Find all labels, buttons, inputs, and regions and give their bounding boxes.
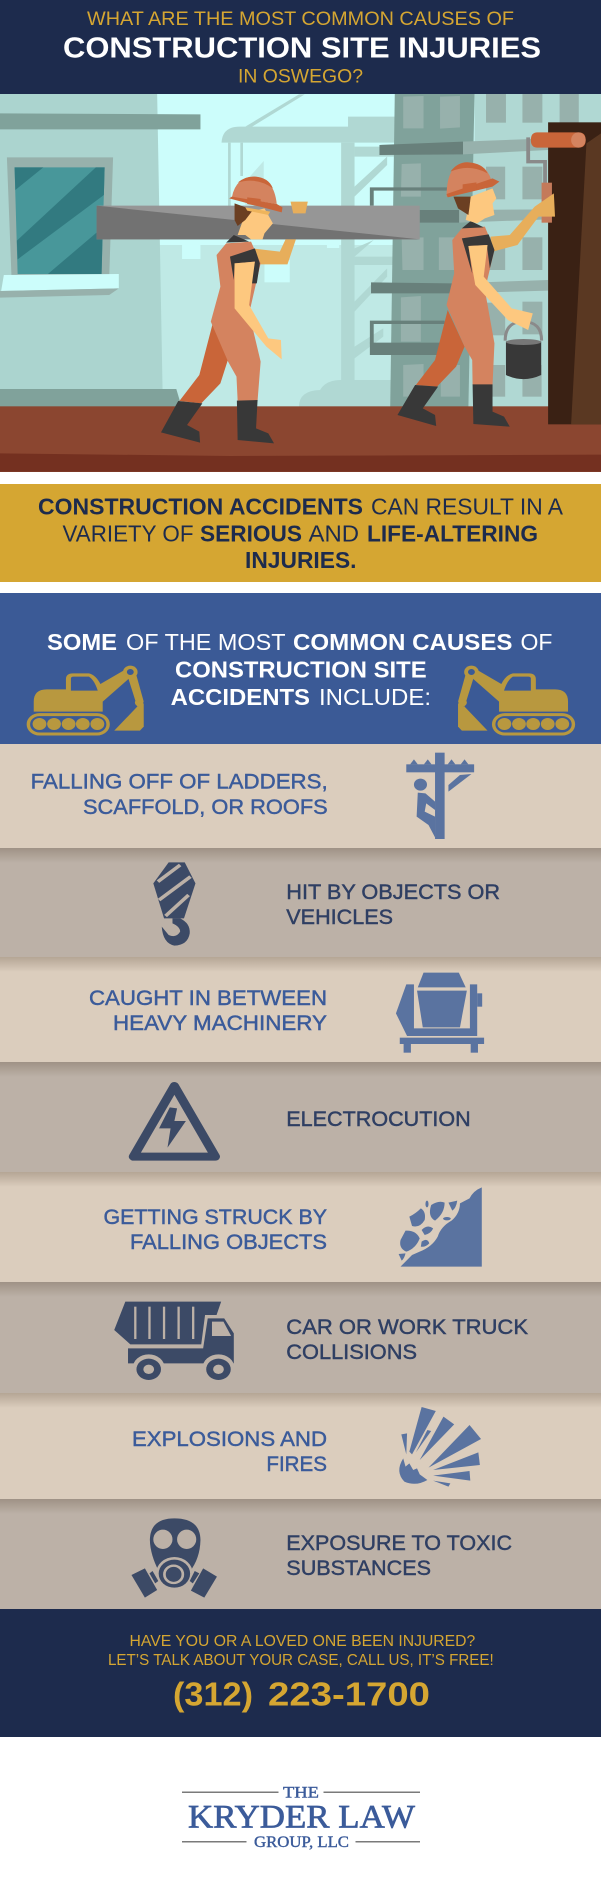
panel: explosions and fires xyxy=(0,1393,601,1499)
cause text xyxy=(104,1206,327,1254)
worker carrying beam xyxy=(161,177,308,443)
call to action text: LET’S TALK ABOUT YOUR CASE, CALL US, IT’S FREE! xyxy=(108,1652,494,1669)
ground xyxy=(0,406,601,472)
panel: truck collisions xyxy=(0,1282,601,1393)
window xyxy=(0,157,119,298)
cause text xyxy=(286,1532,512,1580)
panel: caught in machinery xyxy=(0,957,601,1062)
section heading text: ACCIDENTS xyxy=(171,684,310,710)
statement text: SERIOUS xyxy=(200,520,302,546)
section heading text: OF THE MOST xyxy=(126,629,286,655)
cause text: FALLING OBJECTS xyxy=(130,1231,327,1254)
icon: dump truck xyxy=(114,1302,235,1382)
cause text: FALLING OFF OF LADDERS, xyxy=(31,770,328,793)
paint roller xyxy=(528,132,586,223)
section heading text xyxy=(47,629,552,710)
cause text xyxy=(286,881,500,929)
header banner xyxy=(0,0,601,94)
cause text: COLLISIONS xyxy=(286,1341,417,1364)
icon: excavator right xyxy=(458,666,573,734)
gold statement banner xyxy=(0,484,601,582)
logo: The Kryder Law Group: KRYDER LAW xyxy=(188,1800,416,1836)
cause text: FIRES xyxy=(266,1453,327,1476)
cause text xyxy=(286,1316,528,1364)
statement text: AND xyxy=(308,520,359,546)
cause text: SUBSTANCES xyxy=(286,1557,431,1580)
background crane xyxy=(222,94,399,408)
call to action footer xyxy=(0,1609,601,1737)
section heading text: INCLUDE: xyxy=(319,684,431,710)
section heading text: COMMON CAUSES xyxy=(293,629,512,655)
cause text: HIT BY OBJECTS OR xyxy=(286,881,500,904)
cause text xyxy=(89,987,327,1035)
icon: excavator left xyxy=(28,666,144,734)
logo: The Kryder Law Group: GROUP, LLC xyxy=(254,1834,349,1851)
cause text: CAUGHT IN BETWEEN xyxy=(89,987,327,1010)
section heading text: CONSTRUCTION SITE xyxy=(175,656,427,682)
icon: cement mixer xyxy=(396,973,484,1053)
icon: crane hook xyxy=(153,862,195,946)
phone number: (312) xyxy=(173,1676,253,1713)
right background building xyxy=(464,94,601,408)
icon: high voltage triangle xyxy=(133,1086,215,1157)
icon: gas mask xyxy=(131,1518,217,1598)
section heading text: OF xyxy=(520,629,552,655)
icon: explosion xyxy=(399,1407,481,1487)
left building xyxy=(0,94,200,408)
panel: toxic substances xyxy=(0,1499,601,1609)
call to action text xyxy=(108,1633,494,1669)
cause text: ELECTROCUTION xyxy=(286,1108,471,1131)
logo: The Kryder Law Group xyxy=(182,1785,420,1851)
worker painting xyxy=(397,162,555,427)
statement text xyxy=(38,494,564,573)
panel: electrocution xyxy=(0,1062,601,1172)
blue section heading xyxy=(0,593,601,744)
carried steel beam back xyxy=(97,206,420,239)
statement text: CONSTRUCTION ACCIDENTS xyxy=(38,494,363,520)
call to action text: HAVE YOU OR A LOVED ONE BEEN INJURED? xyxy=(130,1633,475,1650)
icon: pole climber xyxy=(406,753,474,839)
scaffold tower xyxy=(370,94,548,408)
logo: The Kryder Law Group: THE xyxy=(283,1785,319,1802)
cause text: EXPOSURE TO TOXIC xyxy=(286,1532,512,1555)
paint bucket xyxy=(505,322,542,379)
cause text xyxy=(132,1428,327,1476)
cause text: CAR OR WORK TRUCK xyxy=(286,1316,528,1339)
panel: falling off ladders xyxy=(0,744,601,848)
panel: struck by falling objects xyxy=(0,1172,601,1282)
statement text: LIFE-ALTERING xyxy=(367,520,538,546)
header line 1: WHAT ARE THE MOST COMMON CAUSES OF xyxy=(87,8,514,30)
phone number xyxy=(173,1676,430,1713)
icon: rockslide xyxy=(399,1187,482,1267)
cause text xyxy=(31,770,328,819)
header line 3: IN OSWEGO? xyxy=(238,66,363,88)
dark wooden post xyxy=(548,122,601,424)
cause text: GETTING STRUCK BY xyxy=(104,1206,327,1229)
statement text: VARIETY OF xyxy=(62,520,194,546)
cause text: EXPLOSIONS AND xyxy=(132,1428,327,1451)
phone number: 223-1700 xyxy=(268,1676,430,1713)
panel: hit by objects xyxy=(0,848,601,957)
statement text: CAN RESULT IN A xyxy=(371,494,564,520)
title: CONSTRUCTION SITE INJURIES xyxy=(63,32,541,64)
cause text: SCAFFOLD, OR ROOFS xyxy=(83,796,328,819)
statement text: INJURIES. xyxy=(245,547,356,573)
illustration: construction workers xyxy=(0,94,601,472)
cause text: HEAVY MACHINERY xyxy=(113,1012,327,1035)
cause text: VEHICLES xyxy=(286,906,393,929)
section heading text: SOME xyxy=(47,629,117,655)
